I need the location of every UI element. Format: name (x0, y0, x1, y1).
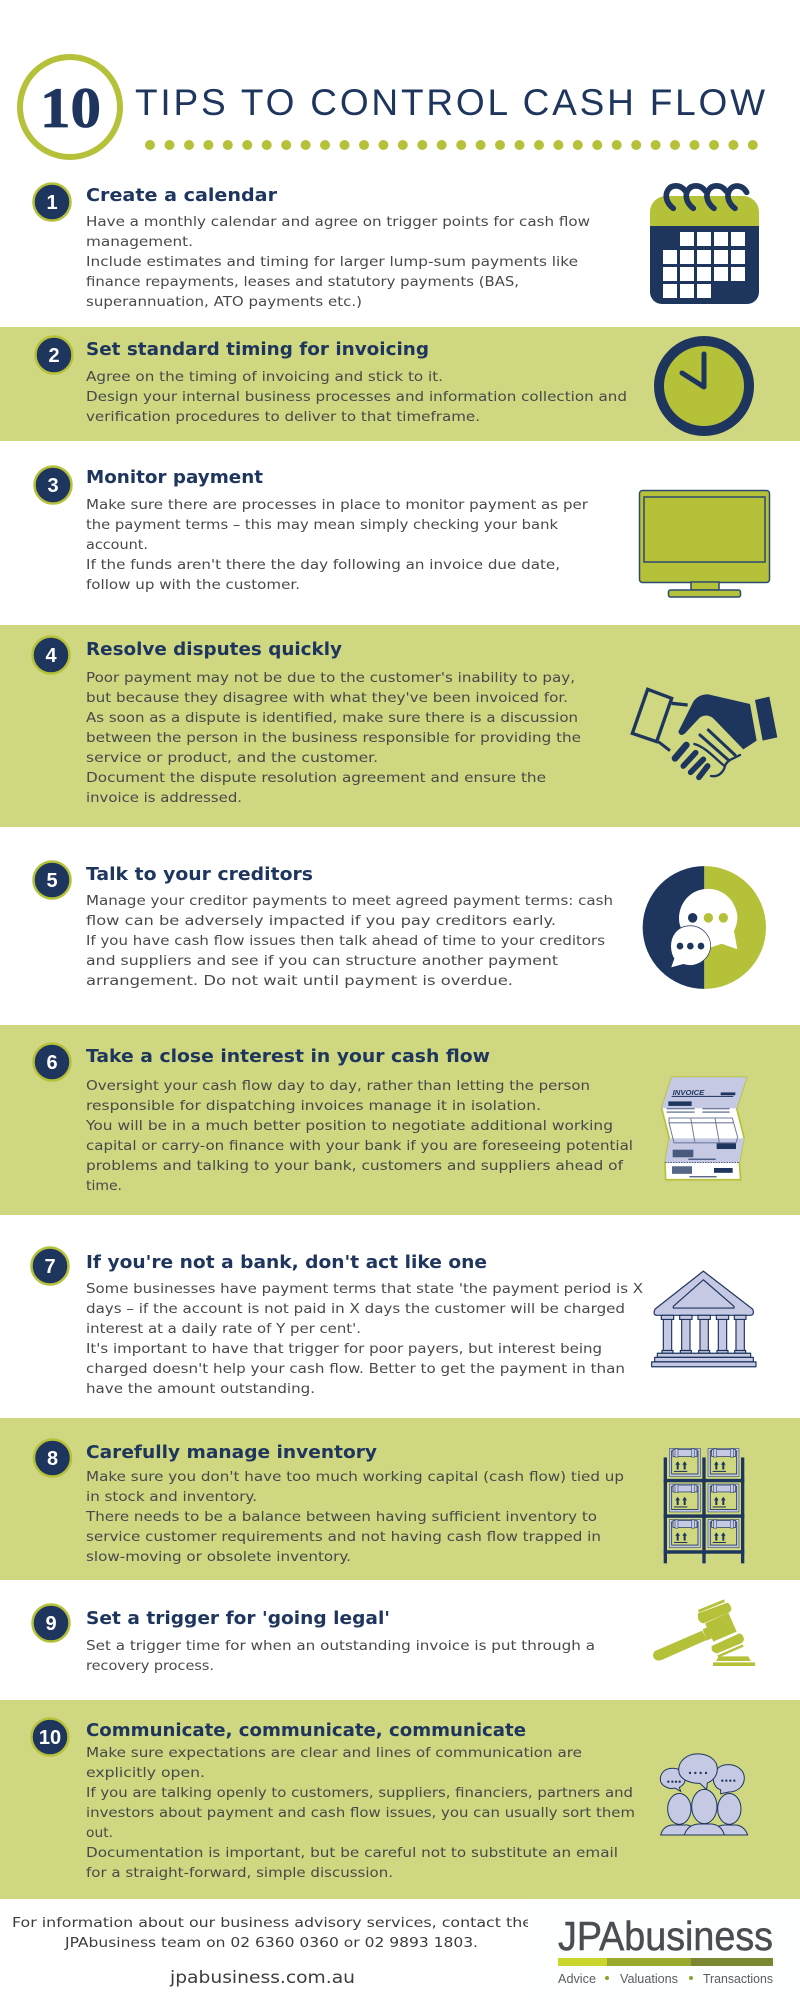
icon: chat bubbles in circle (643, 866, 766, 989)
footer: contact text: JPAbusiness team on 02 6360 0360 or 02 9893 1803. (64, 1935, 478, 1951)
panel: tip 3 (34, 466, 770, 597)
number badge 8: 8 (47, 1448, 58, 1470)
dotted rule (145, 140, 758, 150)
tip 7 text: have the amount outstanding. (86, 1381, 315, 1397)
icon: bank building (652, 1271, 756, 1367)
number badge 9: 9 (45, 1613, 57, 1635)
tip 8 text (85, 1469, 624, 1565)
icon: people talking (660, 1754, 748, 1835)
tip 1 text (86, 214, 590, 310)
number badge 8 (34, 1440, 71, 1476)
tip 8 text: There needs to be a balance between having sufficient inventory to (85, 1509, 597, 1525)
icon: clock (654, 336, 754, 436)
icon: computer monitor (640, 490, 770, 597)
tip 3 text (86, 497, 588, 593)
tip 7 text: charged doesn't help your cash flow. Better to get the payment in than (86, 1361, 625, 1377)
tip 10 text: If you are talking openly to customers, suppliers, financiers, partners and (86, 1785, 633, 1801)
icon: invoice: INVOICE (673, 1088, 705, 1097)
number badge 4 (32, 636, 70, 674)
tip 10 heading: Communicate, communicate, communicate (86, 1721, 526, 1741)
band (0, 1025, 800, 1215)
footer: contact text: For information about our business advisory services, contact the (12, 1915, 532, 1931)
tip 5 text: flow can be adversely impacted if you pay creditors early. (86, 913, 556, 929)
tip 6 text: time. (86, 1178, 122, 1194)
number badge 9 (32, 1604, 70, 1642)
tip 3 text: follow up with the customer. (86, 577, 300, 593)
number badge 2: 2 (48, 345, 60, 367)
tip 10 text (86, 1745, 635, 1881)
tip 9 text (86, 1638, 595, 1674)
tip 7 text: Some businesses have payment terms that state 'the payment period is X (86, 1281, 643, 1297)
tip 8 text: service customer requirements and not having cash flow trapped in (86, 1529, 601, 1545)
tip 3 heading: Monitor payment (86, 468, 263, 488)
icon: inventory shelves (664, 1448, 744, 1563)
tip 5 text (86, 893, 613, 989)
tip 1 text: management. (86, 234, 193, 250)
number badge 2 (36, 336, 72, 374)
tip 9 text: recovery process. (86, 1658, 214, 1674)
icon: gavel (653, 1599, 755, 1666)
panel: tip 6 (0, 1025, 800, 1215)
tip 4 text: between the person in the business responsible for providing the (86, 730, 581, 746)
panel: tip 4 (0, 625, 800, 827)
tip 10 text: investors about payment and cash flow issues, you can usually sort them (86, 1805, 635, 1821)
panel: tip 8 (0, 1418, 800, 1580)
footer: contact text (12, 1915, 532, 1988)
tip 2 text: Design your internal business processes and information collection and (86, 389, 627, 405)
tip 4 text: service or product, and the customer. (86, 750, 378, 766)
tip 5 text: arrangement. Do not wait until payment is overdue. (86, 973, 513, 989)
footer: contact text: jpabusiness.com.au (169, 1968, 355, 1988)
tip 4 text: As soon as a dispute is identified, make sure there is a discussion (86, 710, 578, 726)
tip 9 text: Set a trigger time for when an outstanding invoice is put through a (86, 1638, 595, 1654)
band (0, 1700, 800, 1899)
tip 4 text: but because they disagree with what they've been invoiced for. (86, 690, 568, 706)
tip 3 text: If the funds aren't there the day following an invoice due date, (86, 557, 560, 573)
logo: JPAbusiness: Transactions (703, 1971, 773, 1986)
logo: JPAbusiness (528, 1900, 800, 2000)
tip 1 text: superannuation, ATO payments etc.) (86, 294, 362, 310)
number badge 1 (34, 184, 70, 220)
tip 7 text: interest at a daily rate of Y per cent'. (86, 1321, 361, 1337)
tip 1 heading: Create a calendar (86, 186, 277, 206)
number badge 5: 5 (46, 870, 58, 892)
tip 2 heading: Set standard timing for invoicing (86, 340, 429, 360)
number ten in ring: 10 (40, 77, 101, 140)
band (0, 1418, 800, 1580)
tip 7 text: days – if the account is not paid in X days the customer will be charged (86, 1301, 625, 1317)
number badge 5 (34, 862, 70, 898)
tip 6 text: capital or carry-on finance with your bank if you are foreseeing potential (86, 1138, 633, 1154)
number badge 3 (34, 466, 72, 504)
panel: tip 2 (0, 327, 800, 441)
logo: JPAbusiness: Advice (558, 1971, 596, 1986)
panel: tip 5 (34, 862, 766, 989)
tip 5 text: Manage your creditor payments to meet agreed payment terms: cash (86, 893, 613, 909)
tip 7 text: It's important to have that trigger for poor payers, but interest being (86, 1341, 602, 1357)
band (0, 625, 800, 827)
tip 9 heading: Set a trigger for 'going legal' (86, 1609, 390, 1629)
number badge 4: 4 (45, 645, 57, 667)
tip 7 heading: If you're not a bank, don't act like one (86, 1253, 487, 1273)
tip 4 text: Document the dispute resolution agreement and ensure the (86, 770, 546, 786)
logo: JPAbusiness: Valuations (620, 1971, 678, 1986)
tip 3 text: Make sure there are processes in place to monitor payment as per (86, 497, 588, 513)
icon: handshake (632, 689, 777, 777)
tip 6 text: You will be in a much better position to negotiate additional working (85, 1118, 613, 1134)
number badge 7: 7 (44, 1256, 56, 1278)
tip 6 text: problems and talking to your bank, customers and suppliers ahead of (86, 1158, 624, 1174)
tip 10 text: out. (86, 1825, 113, 1841)
number badge 10 (32, 1718, 68, 1756)
tip 10 text: for a straight-forward, simple discussion. (86, 1865, 393, 1881)
heading: TIPS TO CONTROL CASH FLOW (135, 82, 765, 123)
tip 6 text (85, 1078, 633, 1194)
tip 2 text (86, 369, 627, 425)
logo: JPAbusiness: JPAbusiness (558, 1913, 773, 1959)
tip 8 heading: Carefully manage inventory (86, 1443, 378, 1463)
icon: invoice (662, 1077, 747, 1180)
title (20, 57, 765, 157)
tip 4 text (86, 670, 581, 806)
icon: calendar (650, 186, 759, 304)
tip 2 text: verification procedures to deliver to that timeframe. (86, 409, 480, 425)
tip 6 heading: Take a close interest in your cash flow (86, 1047, 490, 1067)
number badge 7 (32, 1248, 68, 1284)
tip 5 heading: Talk to your creditors (86, 865, 313, 885)
tip 2 text: Agree on the timing of invoicing and stick to it. (86, 369, 443, 385)
tip 6 text: responsible for dispatching invoices manage it in isolation. (86, 1098, 541, 1114)
tip 3 text: the payment terms – this may mean simply checking your bank (86, 517, 558, 533)
tip 1 text: Have a monthly calendar and agree on trigger points for cash flow (86, 214, 590, 230)
tip 10 text: Make sure expectations are clear and lines of communication are (86, 1745, 582, 1761)
tip 5 text: If you have cash flow issues then talk ahead of time to your creditors (86, 933, 605, 949)
tip 4 heading: Resolve disputes quickly (86, 640, 343, 660)
number badge 6 (34, 1044, 70, 1080)
tip 1 text: finance repayments, leases and statutory payments (BAS, (86, 274, 519, 290)
tip 6 text: Oversight your cash flow day to day, rather than letting the person (86, 1078, 590, 1094)
number badge 1: 1 (46, 192, 58, 214)
tip 4 text: invoice is addressed. (86, 790, 242, 806)
tip 10 text: Documentation is important, but be careful not to substitute an email (86, 1845, 618, 1861)
tip 4 text: Poor payment may not be due to the customer's inability to pay, (86, 670, 575, 686)
number badge 6: 6 (46, 1052, 58, 1074)
tip 8 text: in stock and inventory. (86, 1489, 257, 1505)
tip 1 text: Include estimates and timing for larger lump-sum payments like (86, 254, 578, 270)
panel: tip 7 (32, 1248, 756, 1397)
number ten in ring (20, 57, 120, 157)
panel: tip 10 (0, 1700, 800, 1899)
number badge 3: 3 (47, 475, 59, 497)
tip 3 text: account. (86, 537, 148, 553)
tip 5 text: and suppliers and see if you can structure another payment (86, 953, 558, 969)
band (0, 327, 800, 441)
tip 8 text: slow-moving or obsolete inventory. (86, 1549, 351, 1565)
tip 7 text (86, 1281, 643, 1397)
panel: tip 9 (32, 1599, 755, 1674)
tip 10 text: explicitly open. (86, 1765, 205, 1781)
tip 8 text: Make sure you don't have too much working capital (cash flow) tied up (86, 1469, 624, 1485)
panel: tip 1 (34, 184, 759, 310)
number badge 10: 10 (39, 1727, 61, 1749)
